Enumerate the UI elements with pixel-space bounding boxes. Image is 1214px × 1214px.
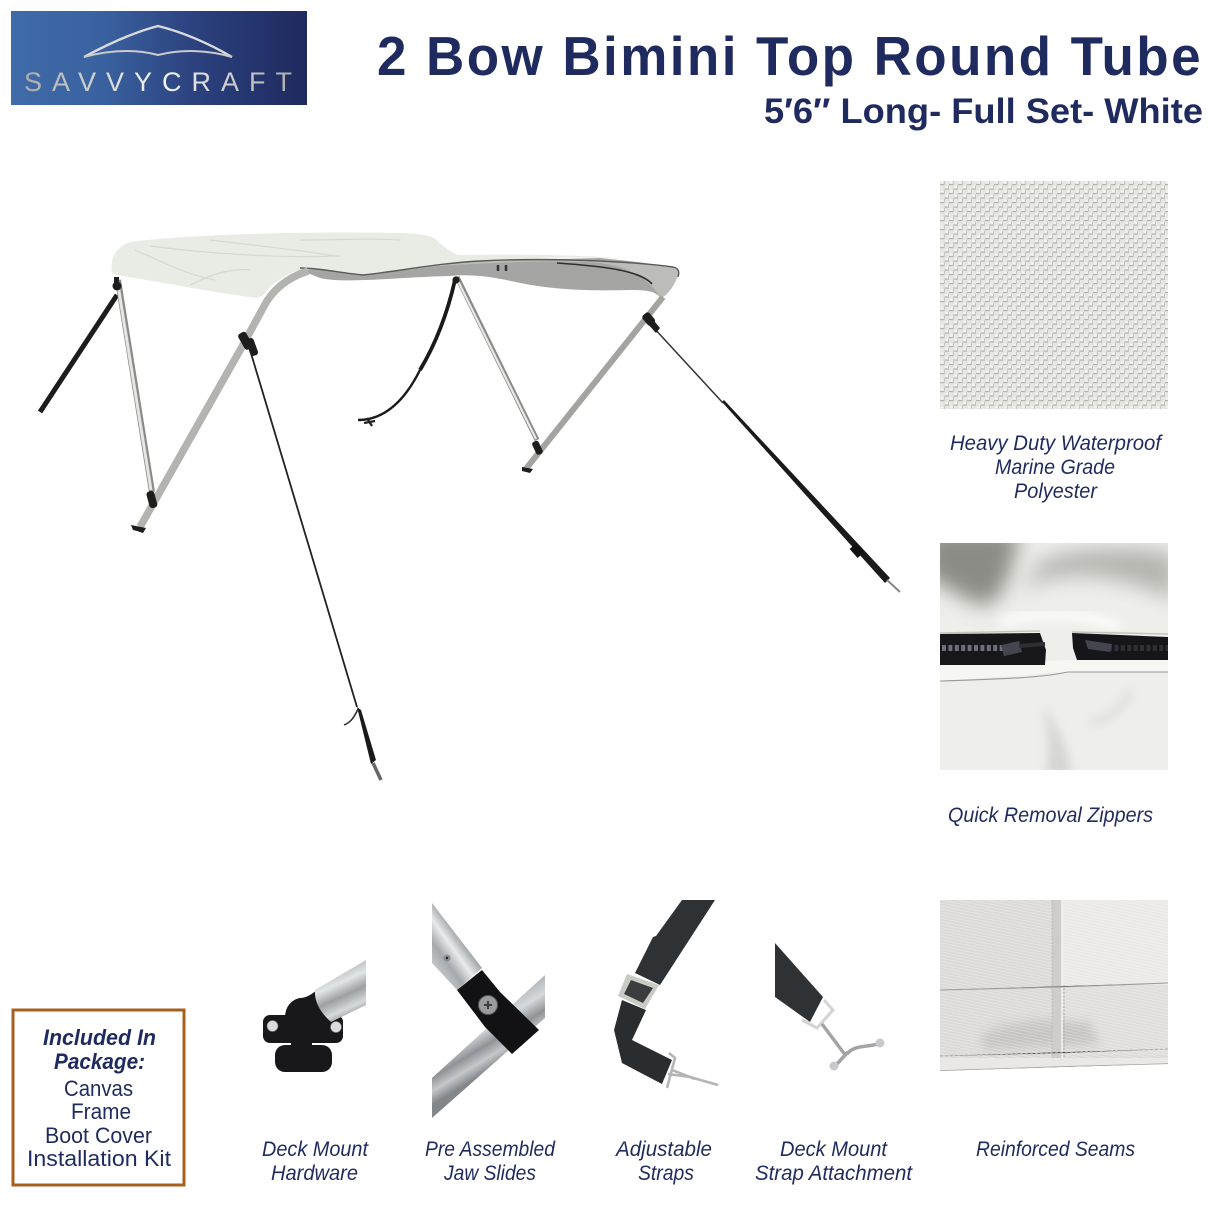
tube [315,960,366,1022]
left rear strap [40,295,117,412]
strap [775,943,823,1022]
product photo: bimini top [40,232,900,780]
caption: fabric: Marine Grade [995,456,1115,479]
ring [802,1000,833,1028]
rear-right main tube [525,297,663,470]
hook [667,1053,718,1088]
canopy fold lines [135,239,400,285]
screw [478,996,498,1014]
caption: Deck Mount [780,1138,888,1161]
swatch: fabric weave [940,181,1168,503]
canopy rear panel [440,259,678,298]
callout heading: Package: [54,1049,145,1074]
small fittings [498,265,506,271]
feature: deck mount hardware [262,960,369,1185]
front strap right [653,327,900,592]
caption [262,1138,369,1185]
caption: Deck Mount [262,1138,369,1161]
rear inner strap [358,280,455,426]
caption: Adjustable [614,1138,712,1161]
caption: fabric: Heavy Duty Waterproof [950,432,1163,455]
caption: Jaw Slides [443,1162,536,1185]
swatch: reinforced seams [940,900,1168,1161]
front bow left tube [140,271,308,527]
pins [830,1038,884,1070]
knob and bracket [263,988,343,1072]
bracket joints [112,276,660,509]
callout list: Installation Kit [27,1146,171,1171]
feature: adjustable straps [614,900,718,1185]
callout list: Boot Cover [45,1123,152,1148]
screws [267,1020,342,1032]
caption: Strap Attachment [755,1162,913,1185]
callout heading: Included In [43,1025,156,1050]
zipper left [940,633,1046,665]
caption [755,1138,913,1185]
black jaw [457,970,539,1054]
logo: Savvycraft [11,11,307,105]
strap lower [614,1000,672,1084]
icon: roof outline [84,26,232,57]
callout heading [43,1025,156,1074]
caption: Hardware [271,1162,358,1185]
strap upper [635,900,715,985]
canopy top fabric [112,232,625,298]
caption: Straps [638,1162,694,1185]
slider buckle [618,974,659,1009]
caption: fabric [950,432,1163,503]
feature: pre assembled jaw slides [425,903,556,1185]
callout list [27,1076,171,1171]
upper tube [432,903,482,990]
logo wordmark: SAVVYCRAFT [24,67,292,97]
caption: Pre Assembled [425,1138,556,1161]
zipper right [1072,633,1168,660]
swatch: quick removal zippers [940,543,1168,826]
lower tube [432,975,545,1118]
front strap left [250,350,381,780]
caption: zippers: Quick Removal Zippers [948,804,1153,827]
caption: seams: Reinforced Seams [976,1138,1135,1161]
caption [614,1138,712,1185]
caption: fabric: Polyester [1014,480,1098,503]
subtitle: 5′6″ Long- Full Set- White [764,92,1203,131]
callout list: Frame [71,1099,131,1124]
canopy edge line [300,260,679,277]
caption [425,1138,556,1185]
callout list: Canvas [64,1076,133,1101]
canopy inner shadow [557,263,652,284]
swivel hook [822,1024,881,1066]
underside of canopy [300,258,679,298]
rear bow left support [118,280,152,492]
title: 2 Bow Bimini Top Round Tube [377,25,1203,87]
deck feet [131,467,533,533]
feature: deck mount strap attachment [755,943,913,1185]
callout: included in package [13,1010,184,1185]
rear bow right support [456,277,537,440]
